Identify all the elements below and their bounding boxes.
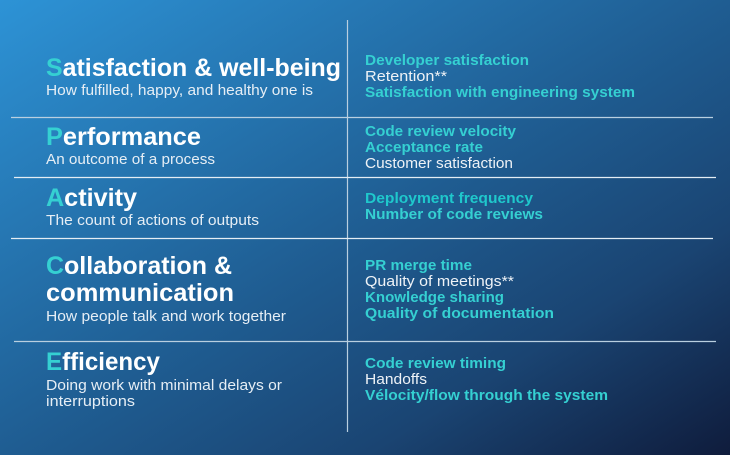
metrics: activity bbox=[365, 191, 543, 223]
description: efficiency bbox=[46, 377, 282, 410]
row: activity bbox=[46, 184, 543, 229]
metrics: performance: Customer satisfaction bbox=[365, 156, 513, 172]
heading: collaboration: Collaboration & bbox=[46, 252, 232, 280]
heading: activity: Activity bbox=[46, 184, 137, 212]
heading: collaboration bbox=[46, 252, 234, 307]
metrics: collaboration: PR merge time bbox=[365, 258, 472, 274]
row: satisfaction and well-being bbox=[46, 53, 635, 101]
description: efficiency: interruptions bbox=[46, 393, 135, 410]
heading: collaboration: communication bbox=[46, 279, 234, 307]
heading: efficiency: Efficiency bbox=[46, 348, 160, 376]
description: performance: An outcome of a process bbox=[46, 151, 215, 168]
metrics: collaboration bbox=[365, 258, 554, 322]
metrics: performance: Code review velocity bbox=[365, 124, 516, 140]
metrics: performance bbox=[365, 124, 516, 172]
row: performance bbox=[46, 123, 516, 172]
metrics: collaboration: Quality of meetings** bbox=[365, 274, 514, 290]
metrics: efficiency: Handoffs bbox=[365, 372, 427, 388]
metrics: satisfaction: Retention** bbox=[365, 69, 447, 85]
metrics: efficiency: Vélocity/flow through the system bbox=[365, 388, 608, 404]
metrics: efficiency bbox=[365, 356, 608, 404]
heading: satisfaction: Satisfaction & well-being bbox=[46, 54, 341, 82]
description: collaboration: How people talk and work together bbox=[46, 308, 286, 325]
metrics: satisfaction: Satisfaction with engineering system bbox=[365, 85, 635, 101]
metrics: performance: Acceptance rate bbox=[365, 140, 483, 156]
row: efficiency bbox=[46, 348, 608, 410]
metrics: efficiency: Code review timing bbox=[365, 356, 506, 372]
metrics: collaboration: Knowledge sharing bbox=[365, 290, 504, 306]
description: activity: The count of actions of outputs bbox=[46, 212, 259, 229]
metrics: activity: Number of code reviews bbox=[365, 207, 543, 223]
metrics: activity: Deployment frequency bbox=[365, 191, 533, 207]
metrics: satisfaction: Developer satisfaction bbox=[365, 53, 529, 69]
metrics: satisfaction bbox=[365, 53, 635, 101]
description: satisfaction: How fulfilled, happy, and healthy one is bbox=[46, 82, 313, 99]
description: efficiency: Doing work with minimal delays or bbox=[46, 377, 282, 394]
heading: performance: Performance bbox=[46, 123, 201, 151]
row: collaboration and communication bbox=[46, 252, 554, 325]
metrics: collaboration: Quality of documentation bbox=[365, 306, 554, 322]
